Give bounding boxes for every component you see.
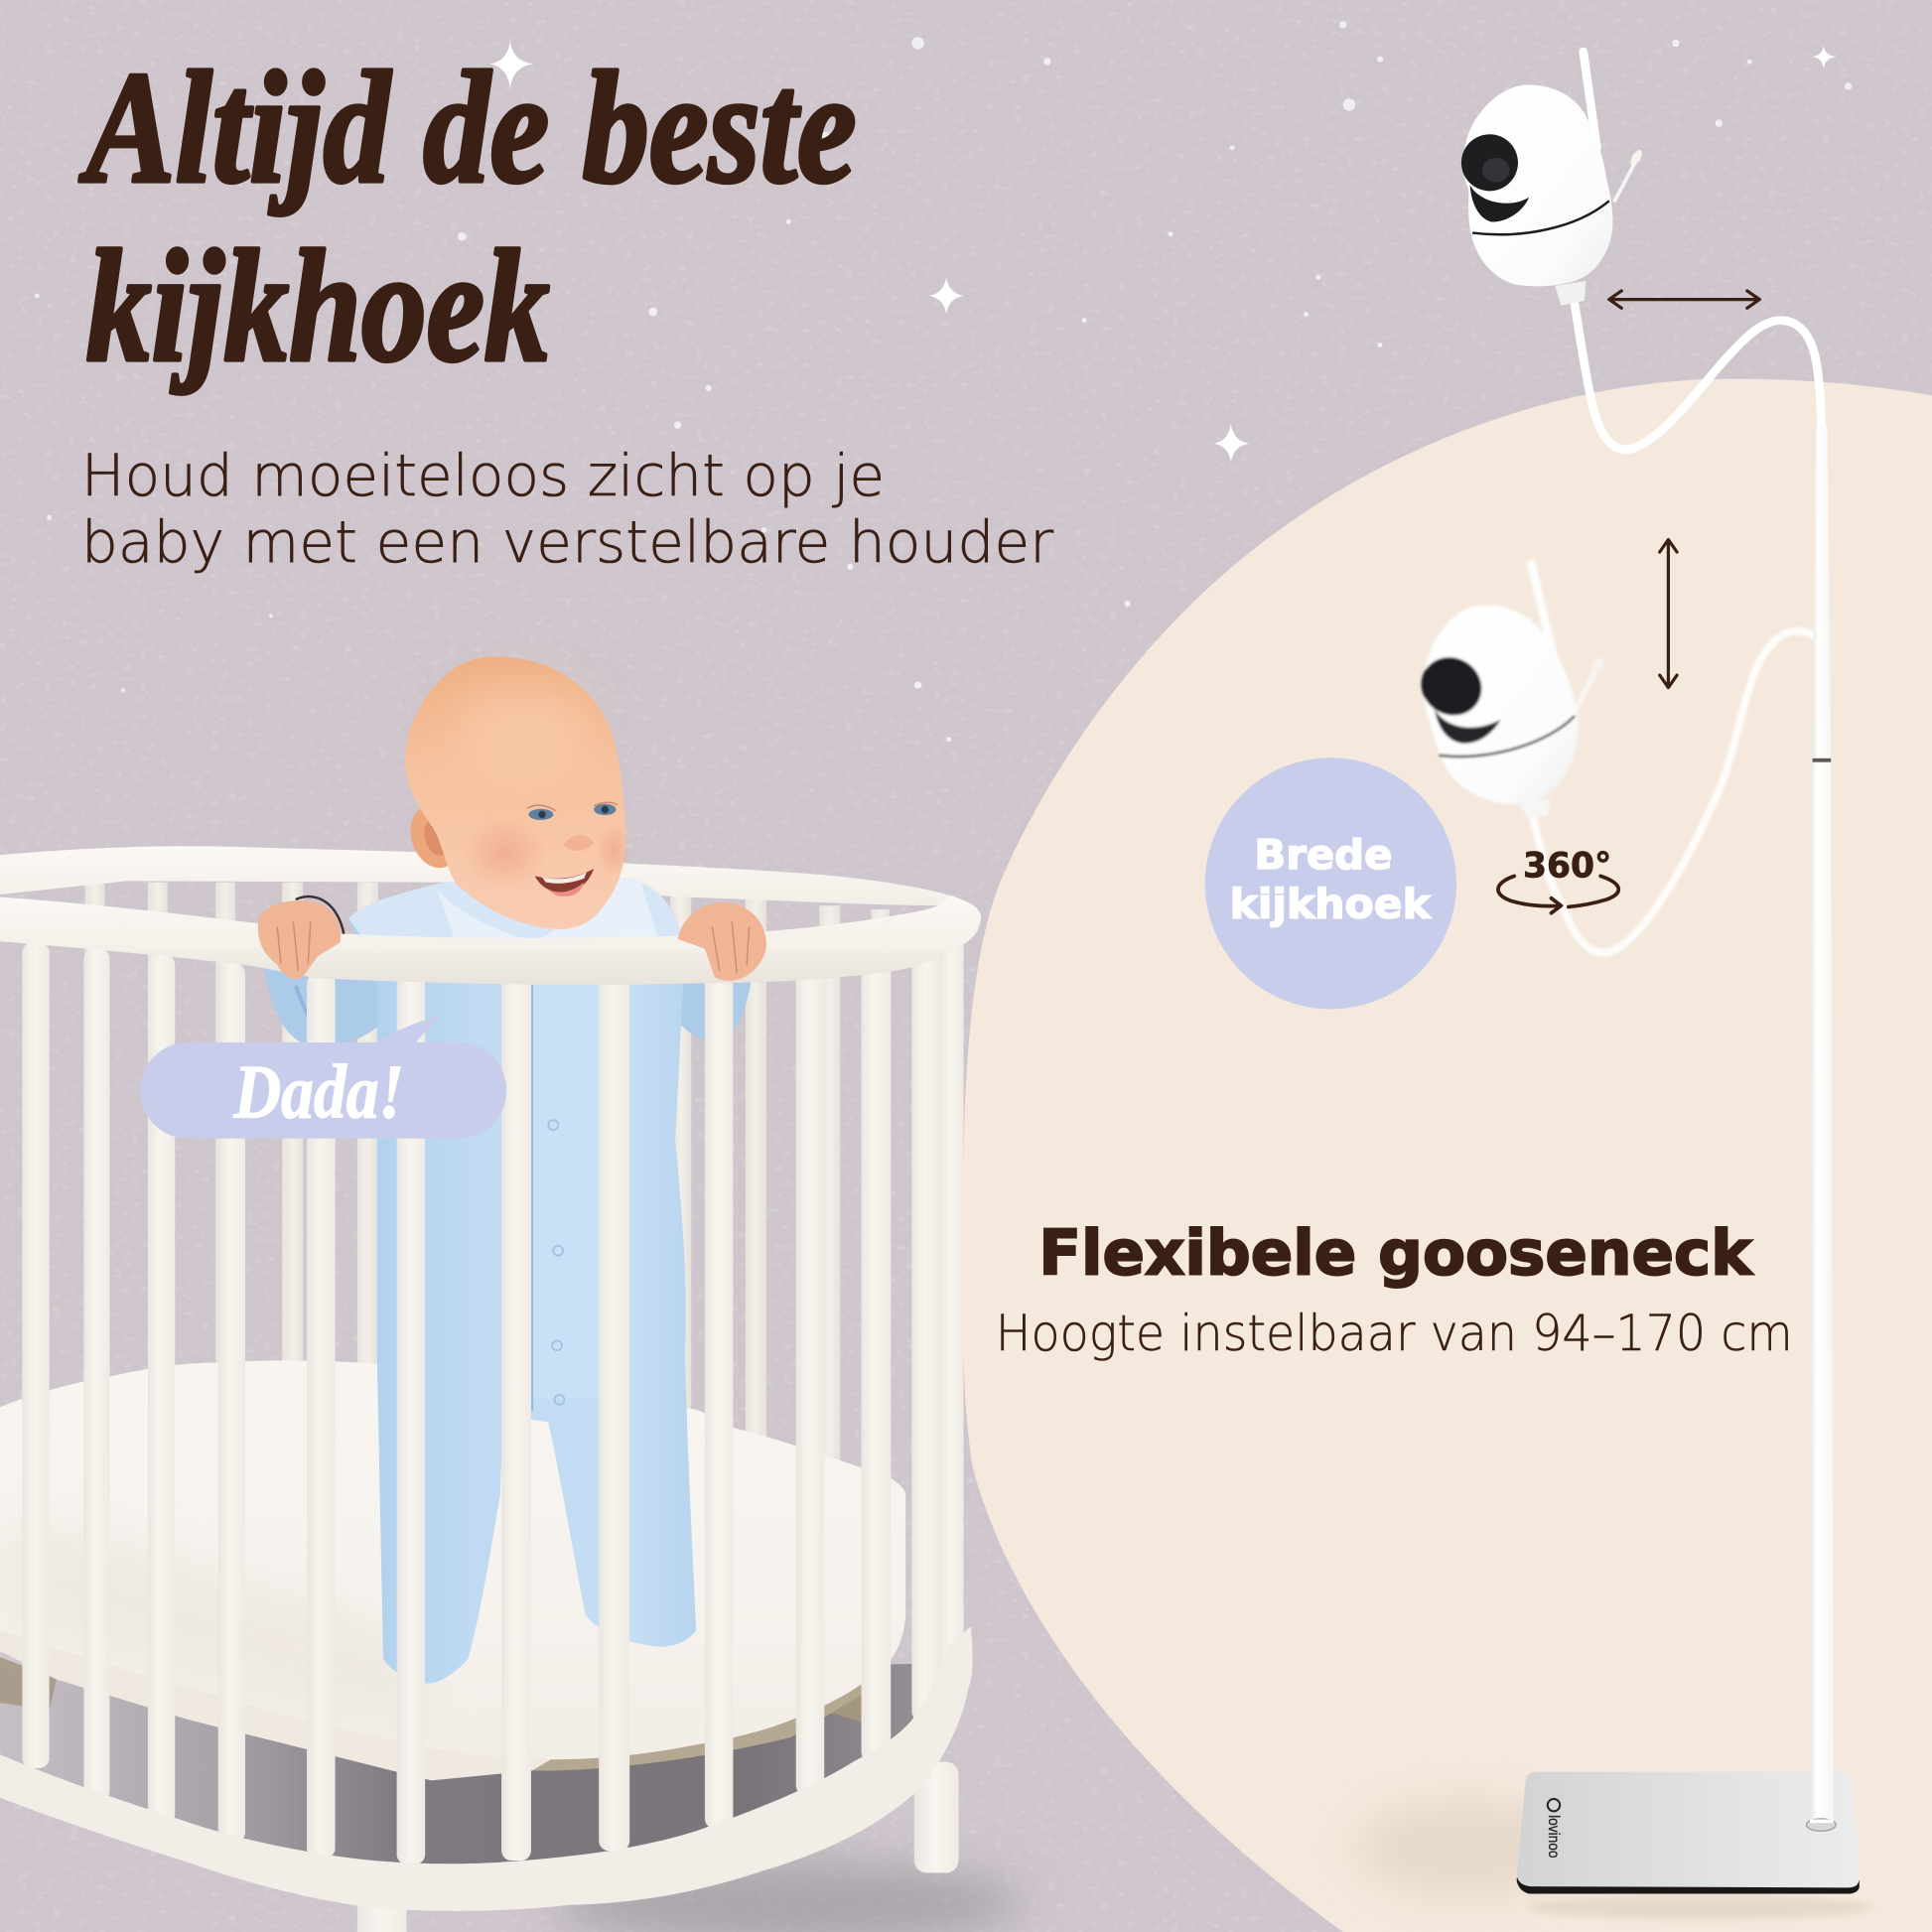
badge line 1: Brede: [1254, 831, 1392, 879]
lens: [1451, 124, 1528, 201]
subtitle line 1: Houd moeiteloos zicht op je: [81, 442, 885, 509]
title line 2: kijkhoek: [86, 216, 550, 394]
torso and legs: [348, 878, 696, 1684]
camera top: [1451, 52, 1644, 306]
badge circle: [1205, 758, 1456, 1009]
head shape: [405, 656, 625, 929]
bubble shape: [140, 1016, 506, 1139]
band line: [1440, 716, 1575, 757]
soft shadow beyond rail: [554, 1862, 1023, 1932]
lens lower shade: [1435, 709, 1501, 744]
left hand: [258, 897, 344, 979]
arrow: horizontal: [1609, 291, 1759, 308]
connector: [1518, 798, 1550, 818]
microphone: [1614, 160, 1636, 203]
lens lower shade: [1470, 185, 1529, 221]
cream blob panel: [963, 379, 1932, 1932]
speech bubble: Dada!: [140, 1016, 506, 1139]
360 degree rotation icon: [1498, 847, 1618, 913]
plate shadow: [1355, 1801, 1578, 1895]
plate top: [1517, 1772, 1860, 1887]
right leg: [914, 1762, 959, 1872]
crib and baby: [0, 656, 1023, 1932]
body: [1424, 605, 1579, 804]
subtitle line 2: baby met een verstelbare houder: [81, 508, 1053, 576]
front top rail: [0, 896, 981, 985]
title line 1: Altijd de beste: [78, 38, 857, 215]
subtitle: [81, 442, 1053, 576]
base board: [0, 1657, 57, 1711]
arrow: vertical: [1660, 540, 1677, 688]
front slats: [22, 936, 964, 1864]
chest: [348, 878, 685, 949]
back slats: [85, 883, 890, 1501]
forehead highlight: [456, 684, 592, 770]
mattress: [0, 1360, 905, 1759]
mouth: [535, 869, 594, 893]
nose: [563, 835, 594, 851]
subheading: height range: Hoogte instelbaar van 94–170 cm: [996, 1305, 1793, 1362]
badge text: [1230, 831, 1432, 928]
camera bottom: [1411, 564, 1606, 818]
cheeks: [464, 816, 547, 890]
back rail: [0, 846, 981, 936]
bottom rail: [0, 1626, 973, 1911]
antenna: [1584, 52, 1596, 148]
badge line 2: kijkhoek: [1230, 881, 1432, 928]
base plate: [1355, 1772, 1872, 1920]
microphone: [1573, 668, 1596, 716]
lens: [1411, 646, 1492, 727]
plate edge: [1517, 1877, 1860, 1894]
logo: lovinoo: [1545, 1815, 1563, 1859]
lower pole: [1810, 762, 1834, 1824]
360 label: 360°: [1523, 847, 1611, 887]
ear: [403, 799, 467, 875]
baby: [262, 656, 755, 1684]
antenna: [1532, 564, 1561, 690]
placket: [532, 973, 602, 1399]
upper gooseneck: [1575, 305, 1821, 450]
body: [1463, 85, 1612, 286]
buttons: [548, 1120, 564, 1405]
badge: brede kijkhoek: [1205, 758, 1456, 1009]
right hand: [678, 902, 766, 981]
rotation arrows: [1498, 876, 1618, 913]
bubble text: Dada!: [233, 1049, 404, 1135]
floor shadow: [0, 1663, 955, 1885]
centre leg: [357, 1897, 407, 1932]
stand with gooseneck: [1532, 305, 1836, 1831]
eyes: [528, 809, 553, 820]
logo icon: [1548, 1799, 1560, 1811]
title: [78, 38, 857, 394]
heading: flexibele gooseneck: Flexibele gooseneck: [1038, 1216, 1754, 1289]
upper pole: [1813, 425, 1831, 758]
pole joint: [1813, 759, 1831, 761]
collar: [438, 878, 659, 942]
lower gooseneck: [1532, 631, 1814, 953]
sparkles: [489, 41, 1836, 462]
band line: [1472, 201, 1609, 234]
pole foot ring: [1806, 1819, 1836, 1831]
sleeves: [262, 961, 397, 1049]
connector: [1555, 281, 1586, 306]
head: [403, 656, 630, 929]
